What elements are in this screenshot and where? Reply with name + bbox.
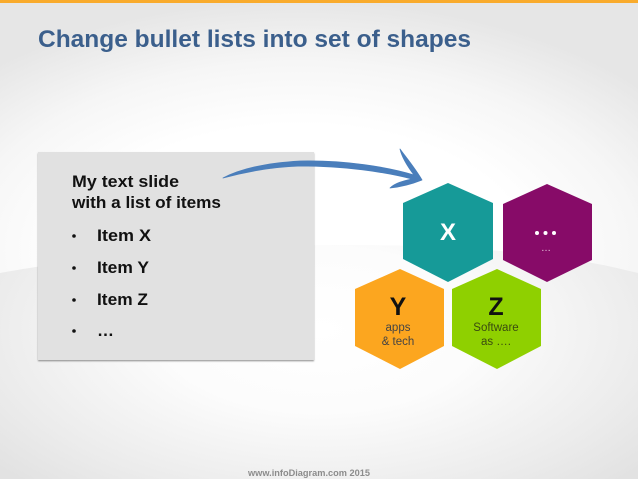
bullet list: Item Z: [97, 291, 148, 309]
hexagon: X: [403, 183, 493, 282]
footer: www.infoDiagram.com 2015: [247, 468, 371, 479]
hexagon: ellipsis: …: [541, 243, 551, 254]
panel heading: with a list of items: [71, 194, 221, 212]
panel heading: My text slide: [72, 173, 179, 191]
hexagon: Y: apps: [386, 322, 411, 334]
hexagon: Y: & tech: [382, 336, 414, 348]
bullet list: Item Y: [97, 259, 149, 277]
hexagon: ellipsis: [503, 184, 592, 282]
panel: text slide: [38, 152, 314, 360]
hexagon: Z: as ….: [481, 336, 511, 348]
arrow: [223, 149, 422, 188]
bullet list: …: [97, 322, 114, 340]
bullet list: [72, 227, 151, 340]
hexagon: Z: Z: [488, 293, 504, 321]
hexagon: Y: [355, 269, 444, 369]
bullet list: Item X: [97, 227, 151, 245]
ellipsis dots: [535, 231, 556, 235]
title: Change bullet lists into set of shapes: [38, 26, 471, 53]
hexagon: Z: [452, 269, 541, 369]
hexagon: X: X: [440, 219, 456, 246]
hexagon: Z: Software: [473, 322, 519, 334]
hexagon: Y: Y: [390, 293, 407, 321]
top accent bar: [0, 0, 638, 3]
